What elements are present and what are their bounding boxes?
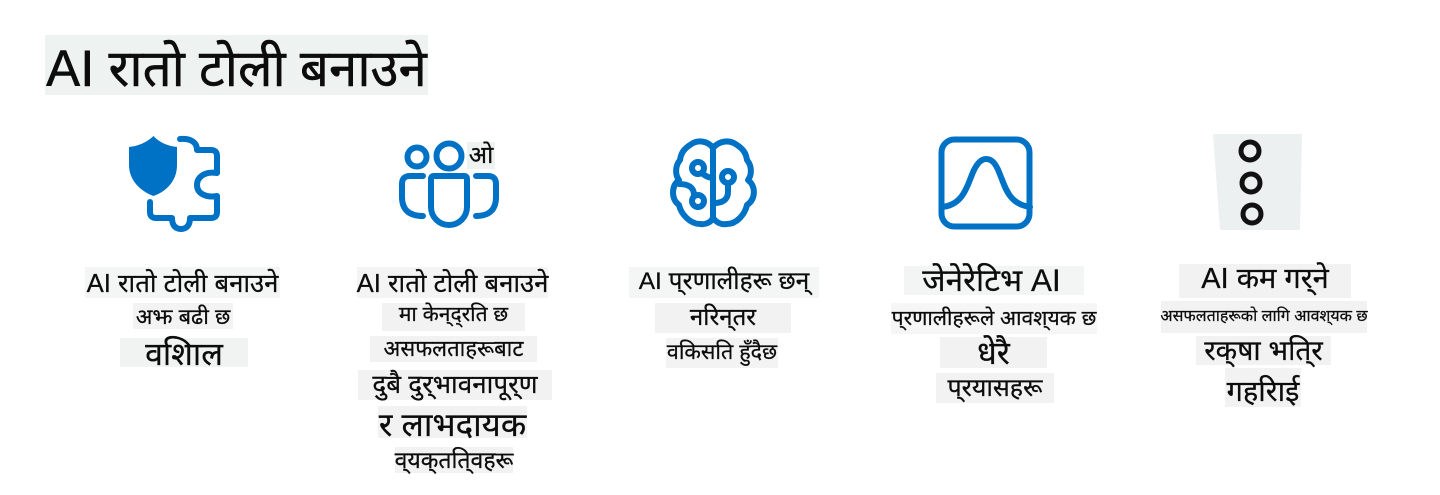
panel: AI systems are constantly evolving	[629, 138, 819, 368]
text line: प्‌रणालीहरूले आवश्‌यक छ	[892, 307, 1096, 330]
text line: AI रातो टोली बनाउने	[87, 270, 278, 298]
text line: अझ बढी छ	[136, 304, 230, 329]
icon: shield and puzzle piece	[129, 136, 220, 232]
text line: गहरिाई	[1227, 376, 1299, 408]
panel: Generative AI systems need more effort	[891, 136, 1097, 403]
text line: वशिाल	[145, 336, 223, 372]
text line: जेनेरेटिभ AI	[922, 262, 1061, 298]
text line	[1179, 264, 1351, 298]
text line: नरिन्‌तर	[690, 304, 756, 331]
text line	[382, 303, 525, 331]
small label: ओ	[469, 142, 493, 168]
icon: people group	[399, 140, 499, 228]
text line	[904, 266, 1084, 295]
panel: AI mitigations need defense in depth	[1160, 134, 1368, 408]
text line: AI प्‌रणालीहरू छन्	[639, 268, 809, 295]
text line	[120, 338, 248, 367]
icon: three circles on grey patch	[1213, 134, 1302, 230]
text line	[1161, 301, 1367, 333]
text line: मा केन्‌द्‌रति छ	[399, 303, 508, 326]
text line: AI कम गर्‌ने	[1201, 263, 1329, 295]
icon: bell curve in rounded square	[938, 136, 1033, 230]
text line: धेरै	[977, 334, 1010, 370]
text line: वकिसति हुँदैछ	[667, 340, 777, 364]
text line: व्‌यक्‌तति्‌वहरू	[395, 446, 513, 472]
text line	[940, 337, 1047, 368]
text line: प्‌रयासहरू	[947, 374, 1042, 402]
icon: brain with circuits	[670, 138, 757, 228]
text line	[655, 303, 791, 333]
text line: रक्‌षा भति्‌र	[1204, 334, 1323, 366]
panel: AI red teaming is broader	[85, 136, 280, 372]
text line: असफलताहरूको लागि आवश्‌यक छ	[1160, 308, 1368, 325]
title: AI रातो टोली बनाउने	[46, 40, 427, 97]
panel: AI red teaming focuses on failures	[356, 140, 552, 474]
text line: असफलताहरूबाट	[384, 336, 523, 361]
text line: AI रातो टोली बनाउने	[357, 270, 548, 298]
text line: र लाभदायक	[379, 406, 526, 442]
text line: दुबै दुर्‌भावनापूर्‌ण	[372, 369, 538, 399]
